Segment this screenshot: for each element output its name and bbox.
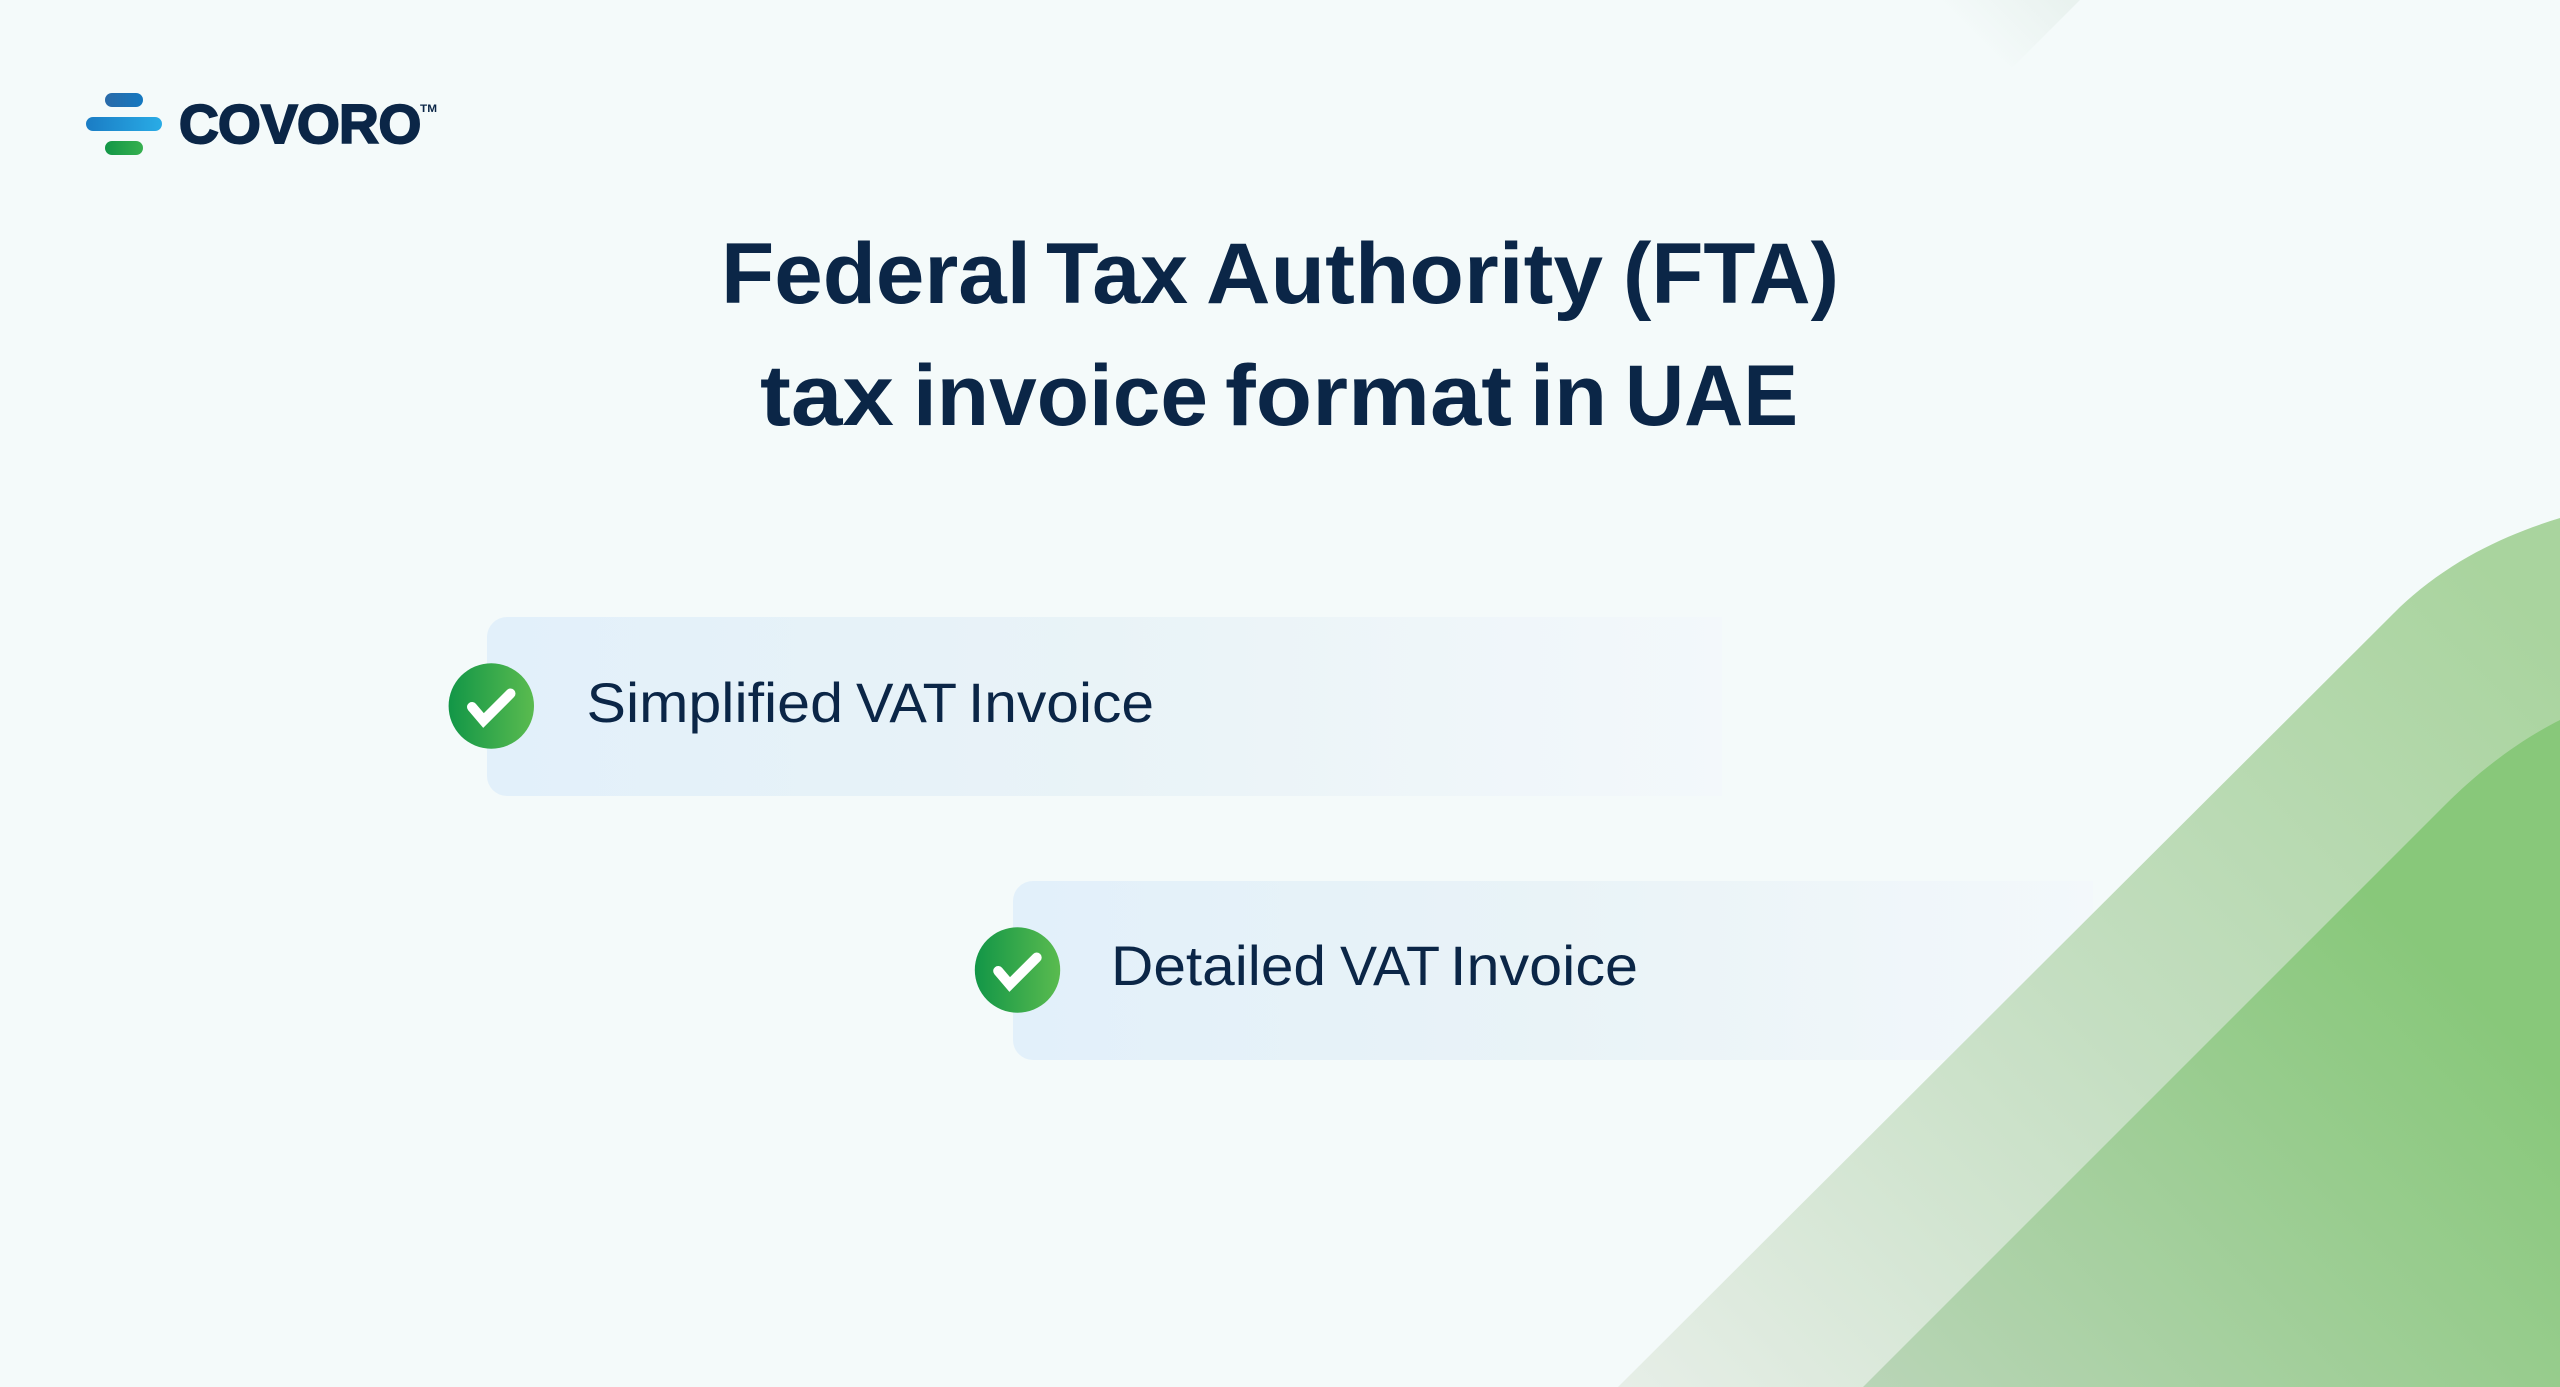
title line 2: invoice: [913, 348, 1208, 444]
title line 2: format: [1225, 348, 1512, 444]
label: simplified VAT invoice: Simplified: [586, 671, 843, 734]
decorative shape: faint top diamond: [1930, 0, 2080, 68]
panel: simplified VAT invoice: [449, 617, 1722, 796]
label: simplified VAT invoice: Invoice: [968, 671, 1154, 734]
label: detailed VAT invoice: Invoice: [1450, 934, 1638, 997]
title line 1: (FTA): [1623, 226, 1839, 322]
wordmark: COVORO: [179, 93, 421, 155]
panel: detailed VAT invoice: [975, 881, 2093, 1060]
bar: detailed: [1013, 881, 2093, 1060]
label: detailed VAT invoice: Detailed: [1111, 934, 1326, 997]
title line 1: Tax: [1046, 226, 1188, 322]
title: [721, 226, 1839, 444]
title line 2: UAE: [1625, 348, 1798, 444]
title line 2: in: [1530, 348, 1607, 444]
decorative shape: outer green wave: [1618, 518, 2560, 1387]
icon: check badge simplified: [449, 663, 534, 749]
title line 1: Authority: [1206, 226, 1603, 322]
label: simplified VAT invoice: VAT: [856, 671, 956, 734]
trademark: TM: [420, 103, 437, 115]
decorative shape: inner green wave: [1863, 720, 2560, 1387]
icon: logo bars: [86, 93, 162, 155]
icon: check badge detailed: [975, 927, 1060, 1013]
logo: Covoro: [86, 93, 437, 155]
label: detailed VAT invoice: VAT: [1340, 934, 1439, 997]
bar: simplified: [487, 617, 1722, 796]
title line 2: tax: [760, 348, 894, 444]
title line 1: Federal: [721, 226, 1031, 322]
